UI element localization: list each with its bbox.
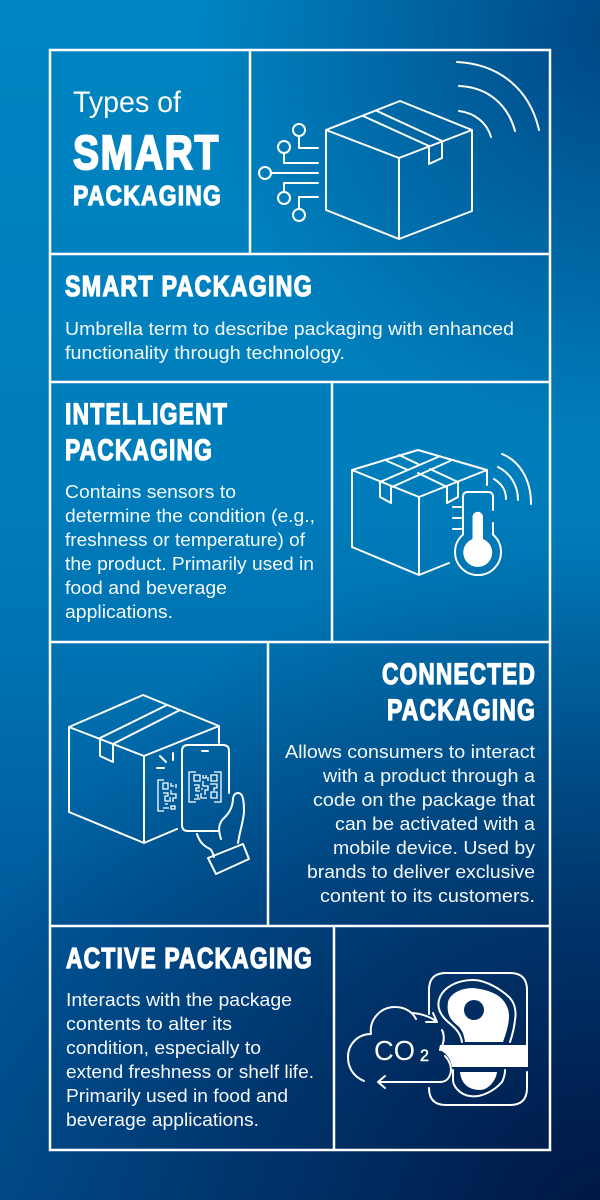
panel: intelligent packaging xyxy=(65,398,315,622)
icon: CO2 cloud and food tray xyxy=(348,973,528,1105)
panel: connected packaging: Allows consumers to interact xyxy=(285,742,535,762)
panel: smart packaging: SMART PACKAGING xyxy=(65,271,313,303)
text: CO2: CO xyxy=(374,1035,415,1066)
panel: connected packaging: brands to deliver exclusive xyxy=(307,862,535,882)
panel: connected packaging: with a product through a xyxy=(322,766,536,786)
panel: intelligent packaging: food and beverage xyxy=(65,578,227,598)
panel: intelligent packaging: determine the condition (e.g., xyxy=(65,506,315,526)
panel: smart packaging: Umbrella term to describe packaging with enhanced xyxy=(65,319,514,339)
panel: active packaging: Interacts with the package xyxy=(66,990,292,1010)
title: SMART xyxy=(73,127,220,180)
panel: intelligent packaging: INTELLIGENT xyxy=(65,398,228,431)
panel: active packaging: extend freshness or shelf life. xyxy=(66,1062,314,1082)
panel: connected packaging: can be activated with a xyxy=(335,814,536,834)
icon: box with circuit and signal xyxy=(259,62,539,239)
panel: active packaging: beverage applications. xyxy=(66,1110,259,1130)
panel: active packaging: ACTIVE PACKAGING xyxy=(66,943,313,975)
icon: QR code on phone xyxy=(189,772,221,802)
panel: active packaging: contents to alter its xyxy=(66,1014,232,1034)
text: CO2: 2 xyxy=(420,1046,429,1065)
panel: connected packaging: CONNECTED xyxy=(382,658,536,691)
panel: connected packaging xyxy=(285,658,536,906)
panel: smart packaging xyxy=(65,271,514,363)
panel: connected packaging: content to its customers. xyxy=(320,886,535,906)
panel: intelligent packaging: applications. xyxy=(65,602,173,622)
panel: intelligent packaging: freshness or temperature) of xyxy=(65,530,306,550)
panel: active packaging xyxy=(66,943,314,1130)
panel: intelligent packaging: the product. Primarily used in xyxy=(65,554,314,574)
icon: box with phone scanning QR code xyxy=(69,695,249,874)
panel: intelligent packaging: Contains sensors to xyxy=(65,482,236,502)
icon: QR code on box xyxy=(158,780,176,811)
panel: active packaging: Primarily used in food and xyxy=(66,1086,288,1106)
panel: intelligent packaging: PACKAGING xyxy=(65,434,213,467)
panel: connected packaging: PACKAGING xyxy=(387,694,536,727)
panel: connected packaging: mobile device. Used by xyxy=(333,838,535,858)
icon: box with thermometer xyxy=(352,450,531,575)
title: PACKAGING xyxy=(73,180,222,211)
panel: active packaging: condition, especially to xyxy=(66,1038,261,1058)
panel: connected packaging: code on the package that xyxy=(313,790,535,810)
title xyxy=(73,86,222,211)
panel: smart packaging: functionality through technology. xyxy=(65,343,345,363)
title: Types of xyxy=(73,86,182,119)
